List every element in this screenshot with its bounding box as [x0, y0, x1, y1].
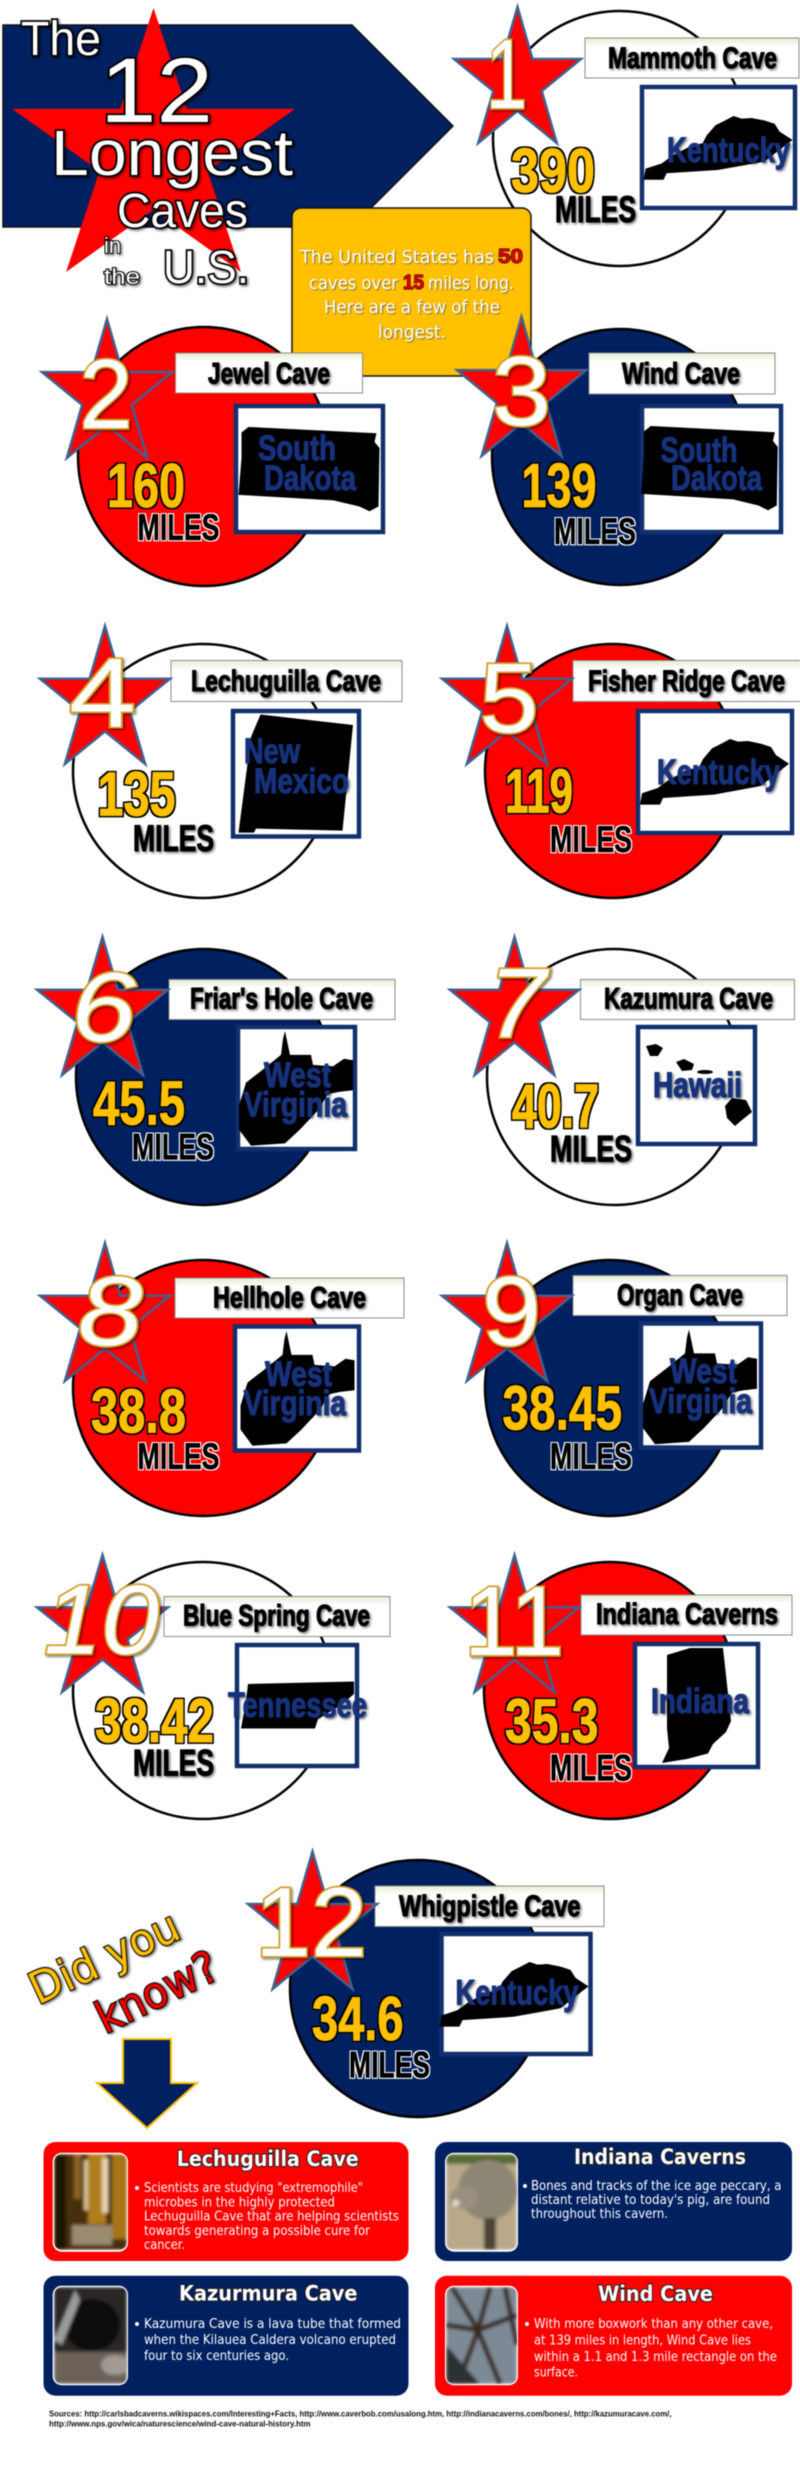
length: 35.3 [505, 1688, 598, 1756]
bullet text: towards generating a possible cure for [144, 2223, 370, 2239]
name: Hellhole Cave [213, 1282, 366, 1314]
intro box: Here are a few of the [324, 297, 500, 318]
intro box: miles long. [428, 273, 514, 294]
circle [73, 1260, 333, 1516]
state map [233, 711, 359, 836]
cave 5: Fisher Ridge Cave [442, 626, 800, 898]
cave 7: Kazumura Cave [450, 937, 794, 1205]
rank star [442, 1243, 572, 1381]
circle [487, 949, 741, 1205]
name label [164, 1596, 390, 1636]
photo: cave formations [53, 2153, 128, 2252]
miles: MILES [138, 1436, 220, 1477]
length: 38.45 [502, 1374, 622, 1444]
state map: West [264, 1056, 331, 1095]
bullet text: surface. [534, 2364, 578, 2380]
state map: Dakota [671, 459, 762, 498]
circle [493, 11, 747, 266]
title star [12, 8, 295, 272]
intro box: 15 [403, 272, 424, 294]
cave 10: Blue Spring Cave [37, 1555, 390, 1819]
name: Blue Spring Cave [183, 1600, 370, 1632]
cave 8: Hellhole Cave [40, 1243, 404, 1516]
length: 38.42 [95, 1687, 214, 1756]
length: 34.6 [312, 1985, 404, 2054]
miles: MILES [138, 507, 220, 548]
state map: Hawaii [653, 1066, 742, 1105]
state map [235, 1326, 359, 1450]
name label [573, 1276, 787, 1316]
circle [492, 329, 748, 585]
circle [485, 1260, 735, 1516]
fact card: Kazumura Cave [44, 2276, 408, 2396]
state map [635, 1644, 758, 1767]
rank number: 1 [486, 19, 527, 129]
title text: 12 [100, 40, 213, 142]
bullet text: at 139 miles in length, Wind Cave lies [534, 2332, 751, 2348]
cave 1: Mammoth Cave [454, 7, 799, 266]
rank number: 9 [482, 1256, 541, 1366]
bullet text: throughout this cavern. [531, 2206, 668, 2222]
rank number: 8 [78, 1256, 142, 1366]
cave 11: Indiana Caverns [450, 1555, 792, 1819]
photo: peccary [445, 2153, 518, 2252]
cave 9: Organ Cave [442, 1243, 787, 1516]
sources [49, 2408, 672, 2428]
rank number: 6 [71, 952, 137, 1062]
did you know heading: know? [87, 1941, 227, 2044]
rank star [457, 317, 586, 456]
state map [238, 1027, 355, 1149]
photo: lava tube [53, 2286, 129, 2385]
name label [585, 38, 799, 78]
name label [589, 353, 775, 394]
rank star [248, 1852, 377, 1989]
rank star [450, 937, 579, 1075]
cave 4: Lechuguilla Cave [40, 626, 402, 898]
heading: Indiana Caverns [574, 2145, 746, 2169]
bullet text: four to six centuries ago. [144, 2348, 289, 2364]
length: 390 [511, 137, 595, 206]
state map: South [258, 429, 336, 468]
rank star [450, 1555, 579, 1692]
miles: MILES [349, 2044, 430, 2086]
miles: MILES [133, 818, 214, 859]
cave 2: Jewel Cave [42, 319, 383, 586]
intro box: 50 [498, 246, 523, 268]
rank star [37, 1555, 168, 1692]
miles: MILES [550, 1436, 632, 1477]
length: 119 [505, 758, 573, 826]
bullet text [135, 2316, 401, 2364]
title text: Longest [51, 117, 293, 189]
name label [580, 980, 794, 1020]
state map [642, 87, 795, 208]
state map: Dakota [264, 459, 356, 498]
fact card: Lechuguilla Cave [44, 2142, 408, 2261]
circle [78, 327, 330, 586]
state map [638, 1027, 755, 1144]
state map [228, 1645, 367, 1766]
heading: Wind Cave [598, 2282, 713, 2306]
title text: Caves [117, 185, 248, 238]
miles: MILES [550, 1128, 632, 1170]
title text: in [104, 233, 121, 258]
circle [484, 1562, 736, 1819]
state map: Virginia [244, 1086, 347, 1124]
state map: New [244, 732, 301, 771]
rank star [442, 626, 572, 764]
heading: Kazurmura Cave [179, 2282, 358, 2306]
name: Organ Cave [617, 1279, 743, 1312]
sources: Sources: http://carlsbadcaverns.wikispaces.com/Interesting+Facts, http://www.caverbob.com/usalong.htm, http://indianacaverns.com/bones/, http://kazumuracave.com/, [49, 2408, 672, 2418]
circle [73, 644, 333, 898]
bullet text: Lechuguilla Cave that are helping scientists [144, 2208, 399, 2224]
state map [641, 1324, 761, 1448]
length: 40.7 [512, 1072, 599, 1142]
rank star [454, 7, 581, 143]
state map [236, 406, 383, 532]
did you know heading [21, 1901, 227, 2044]
length: 160 [107, 452, 185, 521]
bullet text [523, 2178, 782, 2222]
rank number: 12 [255, 1867, 367, 1977]
name label [573, 660, 800, 702]
bullet text [135, 2180, 399, 2253]
name: Friar's Hole Cave [190, 982, 373, 1016]
arrow: pointing down [97, 2039, 197, 2128]
state map [641, 406, 781, 532]
title text: the [104, 264, 140, 289]
circle [76, 949, 332, 1205]
length: 139 [522, 452, 596, 521]
state map: Virginia [649, 1382, 752, 1421]
rank star [40, 1243, 170, 1381]
title text [21, 13, 293, 293]
length: 38.8 [91, 1378, 186, 1446]
state map: Indiana [651, 1682, 749, 1721]
bullet text: distant relative to today's pig, are found [531, 2192, 770, 2208]
circle [485, 644, 739, 898]
miles: MILES [132, 1126, 214, 1168]
name: Jewel Cave [208, 358, 330, 390]
state map: Kentucky [456, 1974, 579, 2012]
intro box: longest. [378, 322, 446, 343]
miles: MILES [555, 189, 636, 230]
name label [169, 980, 395, 1020]
fact card: Indiana Caverns [435, 2142, 792, 2261]
state map: West [670, 1352, 737, 1391]
rank number: 10 [44, 1564, 159, 1674]
bullet text: cancer. [144, 2237, 185, 2253]
name label [375, 1886, 604, 1926]
rank number: 2 [80, 339, 132, 449]
rank number: 3 [492, 336, 551, 446]
did you know heading: Did you [21, 1901, 188, 2015]
name label [175, 1278, 404, 1318]
rank number: 5 [480, 643, 538, 753]
name label [581, 1595, 792, 1635]
state map: Virginia [244, 1384, 346, 1423]
state map [638, 711, 792, 833]
rank number: 11 [464, 1566, 564, 1676]
cave 3: Wind Cave [457, 317, 781, 585]
heading: Lechuguilla Cave [177, 2147, 359, 2171]
bullet text: Kazumura Cave is a lava tube that formed [144, 2316, 401, 2332]
name: Wind Cave [622, 358, 740, 390]
title banner: navy arrow [3, 25, 453, 227]
state map: Mexico [254, 762, 349, 801]
rank star [40, 626, 170, 764]
name: Lechuguilla Cave [191, 665, 381, 698]
rank star [42, 319, 172, 458]
miles: MILES [554, 511, 636, 552]
name label [176, 353, 362, 393]
bullet text: microbes in the highly protected [144, 2194, 335, 2210]
cave 12: Whigpistle Cave [248, 1852, 604, 2117]
state map: Tennessee [228, 1686, 367, 1725]
photo: boxwork [445, 2286, 518, 2385]
cave 6: Friar's Hole Cave [37, 937, 395, 1205]
rank number: 7 [488, 948, 550, 1058]
fact card: Wind Cave [435, 2276, 792, 2396]
rank star [37, 937, 168, 1075]
length: 135 [98, 760, 176, 830]
name: Whigpistle Cave [399, 1890, 580, 1923]
state map: South [660, 431, 738, 470]
miles: MILES [133, 1742, 214, 1784]
name label [171, 660, 402, 702]
length: 45.5 [93, 1070, 185, 1138]
state map [440, 1934, 590, 2054]
state map: West [265, 1355, 332, 1394]
intro box [292, 208, 531, 376]
circle [73, 1562, 333, 1819]
bullet text: when the Kilauea Caldera volcano erupted [144, 2332, 396, 2348]
rank number: 4 [69, 638, 136, 748]
intro box: The United States has [299, 247, 494, 268]
sources: http://www.nps.gov/wica/naturescience/wind-cave-natural-history.htm [49, 2418, 311, 2428]
miles: MILES [550, 819, 632, 860]
title text: The [21, 13, 101, 66]
miles: MILES [550, 1748, 632, 1788]
circle [290, 1860, 546, 2117]
intro box: caves over [309, 273, 399, 294]
title text: U.S. [163, 241, 249, 293]
bullet text [525, 2316, 777, 2380]
bullet text: Scientists are studying "extremophile" [144, 2180, 363, 2196]
